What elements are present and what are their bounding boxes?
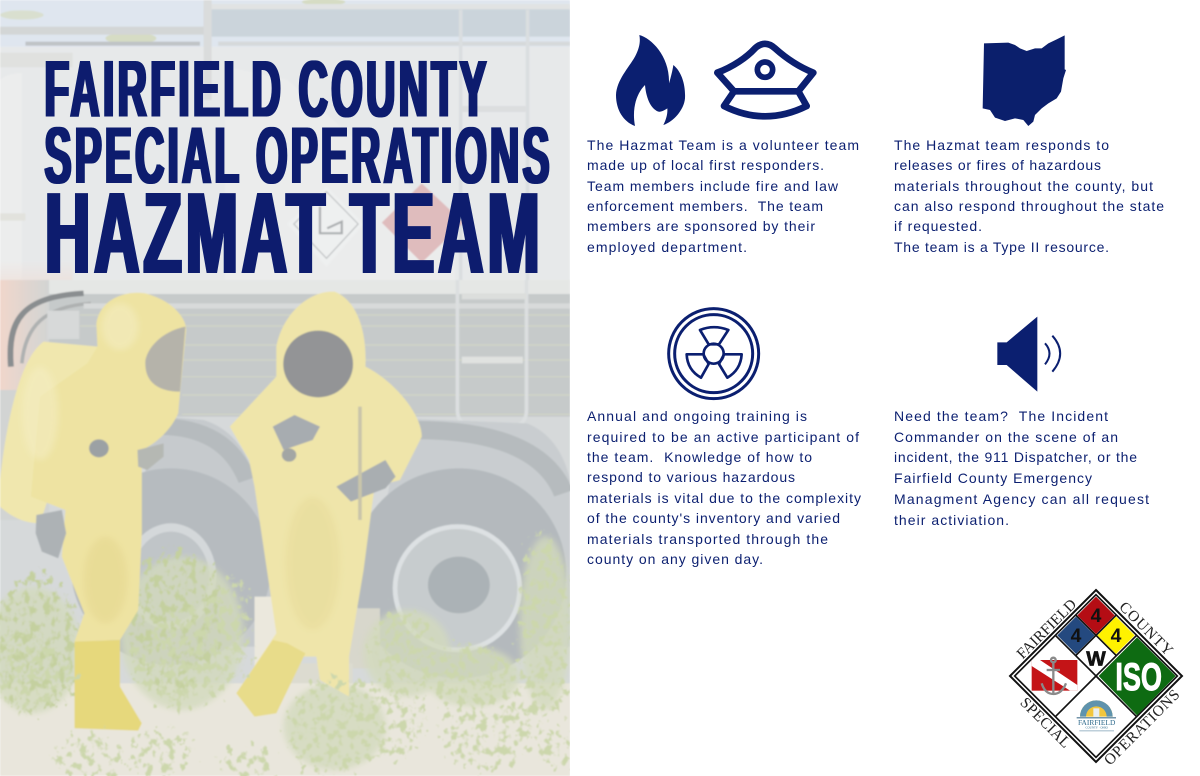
- text block: requesting the team: incident, the 911 Dispatcher, or the: [894, 449, 1137, 465]
- logo: ISO green diamond: [1099, 637, 1176, 715]
- ground: [0, 683, 570, 776]
- text block: team makeup: enforcement members. The team: [587, 198, 823, 214]
- text block: training: [587, 408, 861, 567]
- text block: response area: [894, 137, 1164, 255]
- text block: response area: The team is a Type II resource.: [894, 239, 1109, 255]
- photo: truck and figures: [0, 280, 574, 776]
- figure: left responder: [0, 293, 186, 731]
- text block: training: county on any given day.: [587, 551, 763, 567]
- logo: ISO green diamond: ISO: [1115, 655, 1162, 699]
- text block: requesting the team: [894, 408, 1149, 528]
- plants base tint: [0, 537, 571, 770]
- text block: response area: materials throughout the county, but: [894, 178, 1153, 194]
- title: [44, 43, 550, 298]
- text block: training: of the county's inventory and varied: [587, 510, 840, 526]
- logo: ring text: FAIRFIELD: [1016, 600, 1076, 660]
- text block: training: materials is vital due to the complexity: [587, 490, 861, 506]
- photo: tanker top and sky: [0, 0, 570, 300]
- text block: requesting the team: Commander on the scene of an: [894, 429, 1118, 445]
- icon: speaker: [997, 317, 1060, 392]
- icon: flame: [616, 35, 685, 126]
- logo: ring text: SPECIAL: [1020, 698, 1068, 748]
- logo: dive flag with anchor: [1032, 658, 1077, 694]
- truck wheels and fenders: [71, 415, 570, 678]
- text block: training: Annual and ongoing training is: [587, 408, 807, 424]
- logo: W diamond: W: [1086, 647, 1106, 670]
- logo: yellow diamond: 4: [1111, 626, 1122, 647]
- logo: yellow diamond: [1097, 617, 1135, 654]
- plants in foreground: [0, 533, 574, 776]
- logo: county seal: FAIRFIELD: [1078, 719, 1115, 727]
- text block: team makeup: The Hazmat Team is a volunteer team: [587, 137, 859, 153]
- text block: response area: can also respond throughout the state: [894, 198, 1164, 214]
- logo: county seal: [1077, 700, 1116, 731]
- figure: right responder: [230, 292, 422, 717]
- text block: team makeup: members are sponsored by their: [587, 218, 815, 234]
- text block: team makeup: Team members include fire and law: [587, 178, 839, 194]
- text block: team makeup: [587, 137, 859, 255]
- logo: county seal: COUNTY · OHIO: [1086, 726, 1109, 730]
- title line: Fairfield County: FAIRFIELD COUNTY: [44, 43, 486, 134]
- panel: hazmat photo: [0, 0, 574, 776]
- logo: ring text: OPERATIONS: [1105, 690, 1179, 764]
- text block: training: required to be an active participant of: [587, 429, 859, 445]
- logo: ring text: [1016, 600, 1179, 764]
- photo: hazard placards: [293, 183, 462, 260]
- logo: red diamond: 4: [1091, 606, 1102, 627]
- plants behind figures: [0, 547, 222, 713]
- text block: training: the team. Knowledge of how to: [587, 449, 812, 465]
- text block: response area: The Hazmat team responds to: [894, 137, 1109, 153]
- text block: requesting the team: their activiation.: [894, 512, 1009, 528]
- logo: blue diamond: [1057, 617, 1095, 654]
- text block: requesting the team: Fairfield County Emergency: [894, 470, 1092, 486]
- logo: Fairfield County Special Operations emblem: [1008, 588, 1184, 764]
- text block: training: respond to various hazardous: [587, 469, 795, 485]
- text block: training: materials transported through the: [587, 531, 828, 547]
- icon: police cap: [717, 44, 813, 116]
- text block: team makeup: employed department.: [587, 239, 747, 255]
- icon: Ohio map: [983, 35, 1066, 126]
- logo: blue diamond: 4: [1071, 626, 1082, 647]
- buckets: [255, 597, 380, 683]
- title line: Special Operations: SPECIAL OPERATIONS: [44, 110, 550, 201]
- text block: response area: if requested.: [894, 218, 982, 234]
- logo: ring text: COUNTY: [1120, 602, 1174, 654]
- text block: team makeup: made up of local first responders.: [587, 157, 824, 173]
- title line: Hazmat Team: HAZMAT TEAM: [45, 168, 540, 298]
- icon: radiation symbol: [669, 309, 759, 399]
- text block: response area: releases or fires of hazardous: [894, 157, 1101, 173]
- logo: red diamond: [1077, 597, 1115, 634]
- text block: requesting the team: Managment Agency can all request: [894, 491, 1149, 507]
- text block: requesting the team: Need the team? The Incident: [894, 408, 1108, 424]
